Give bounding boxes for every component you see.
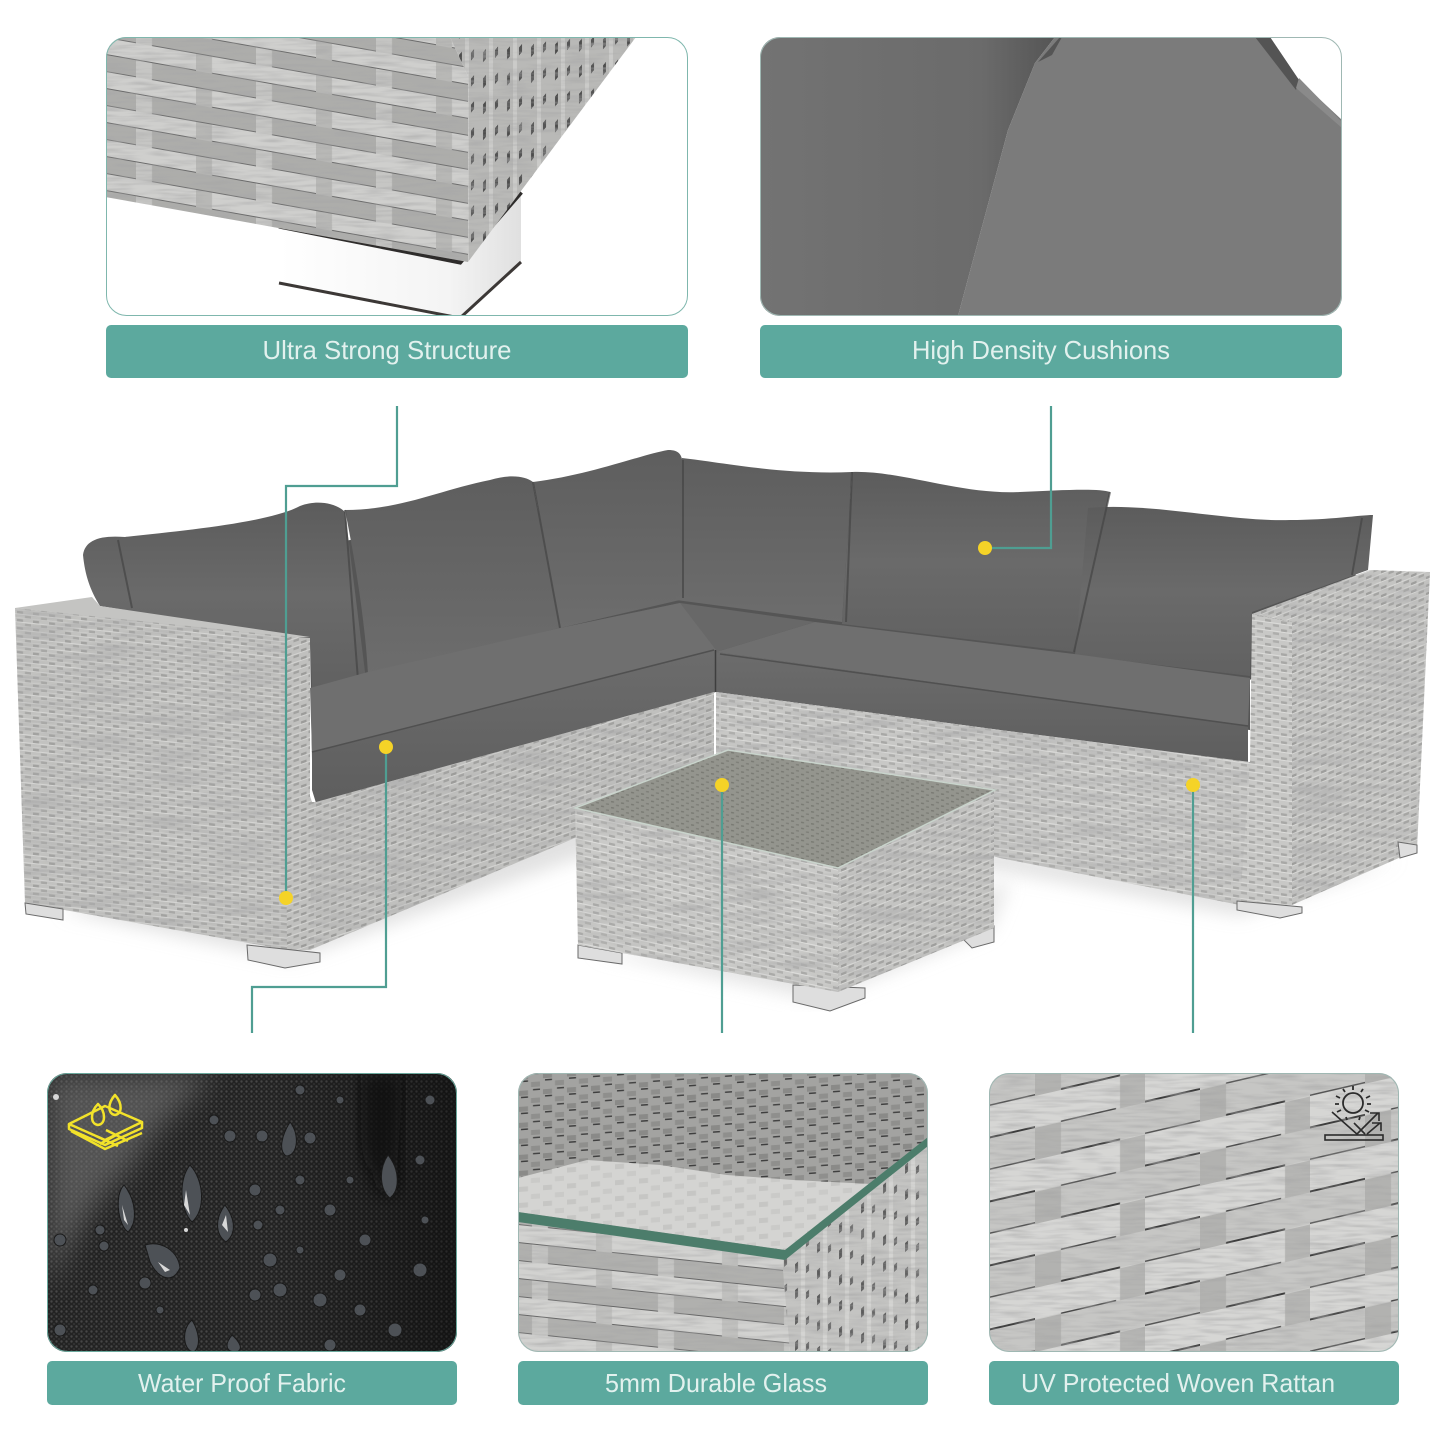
label: UV protected woven rattan bbox=[989, 1361, 1399, 1405]
right arm side bbox=[1252, 570, 1430, 905]
label: high density cushions bbox=[760, 325, 1342, 378]
callout line: fabric bbox=[252, 747, 386, 1033]
back cushion 2 bbox=[345, 476, 560, 674]
callout dots bbox=[279, 541, 1200, 905]
sofa illustration bbox=[15, 450, 1430, 1011]
back cushion 4 bbox=[676, 458, 852, 622]
left arm top bbox=[15, 597, 310, 637]
dark fabric fold bbox=[360, 1073, 401, 1194]
table side bbox=[838, 790, 994, 992]
label: UV protected woven rattan: UV Protected Woven Rattan bbox=[1021, 1368, 1335, 1398]
panel: UV protected rattan photo bbox=[989, 1073, 1399, 1352]
wicker under glass bbox=[518, 1073, 928, 1263]
right arm end bbox=[1240, 614, 1292, 905]
front cushion bbox=[958, 37, 1342, 316]
label: water proof fabric bbox=[47, 1361, 457, 1405]
callout line: structure bbox=[286, 406, 397, 898]
label: ultra strong structure: Ultra Strong Structure bbox=[262, 335, 512, 365]
cushion backing bbox=[130, 480, 1360, 760]
water droplets bbox=[54, 1085, 435, 1352]
table shadow bbox=[590, 880, 1010, 1000]
base left wicker bbox=[288, 692, 714, 950]
rattan side bbox=[782, 1145, 928, 1352]
back cushion 5 bbox=[842, 472, 1110, 652]
panel: water proof fabric photo bbox=[47, 1073, 457, 1352]
table front bbox=[575, 808, 838, 992]
coffee table bbox=[575, 750, 995, 992]
left arm front bbox=[15, 608, 288, 950]
back cushion 6 bbox=[1075, 507, 1373, 676]
back cushion 3 bbox=[533, 450, 683, 628]
label: water proof fabric: Water Proof Fabric bbox=[138, 1368, 346, 1398]
glass reflection bbox=[518, 1160, 871, 1250]
floor shadow bbox=[60, 780, 1400, 960]
icon: waterproof layers bbox=[69, 1095, 142, 1149]
callout line: glass bbox=[721, 785, 723, 1033]
back cushion bbox=[760, 37, 1055, 316]
wicker side face bbox=[450, 37, 636, 262]
panel: durable glass photo bbox=[518, 1073, 928, 1352]
corner seat top bbox=[560, 603, 815, 652]
rattan below glass bbox=[518, 1220, 790, 1352]
panel: ultra strong structure photo bbox=[100, 37, 688, 318]
label: ultra strong structure bbox=[106, 325, 688, 378]
feet bbox=[25, 842, 1417, 1011]
aluminium foot bbox=[279, 188, 521, 318]
label: 5mm durable glass: 5mm Durable Glass bbox=[605, 1368, 827, 1398]
glass edge bbox=[518, 1137, 928, 1260]
base right wicker bbox=[716, 692, 1292, 905]
right seat cushion bbox=[716, 622, 1250, 762]
callout line: cushions bbox=[985, 406, 1051, 548]
label: high density cushions: High Density Cushions bbox=[912, 335, 1170, 365]
callout line: rattan bbox=[1192, 785, 1194, 1033]
panel: high density cushions photo bbox=[760, 37, 1342, 316]
icon: UV sun bbox=[1325, 1086, 1383, 1140]
left arm end bbox=[285, 636, 312, 950]
left seat cushion bbox=[310, 603, 716, 803]
label: 5mm durable glass bbox=[518, 1361, 928, 1405]
back cushion 1 bbox=[83, 503, 366, 688]
wicker front face bbox=[100, 37, 468, 262]
glass top bbox=[575, 750, 995, 868]
